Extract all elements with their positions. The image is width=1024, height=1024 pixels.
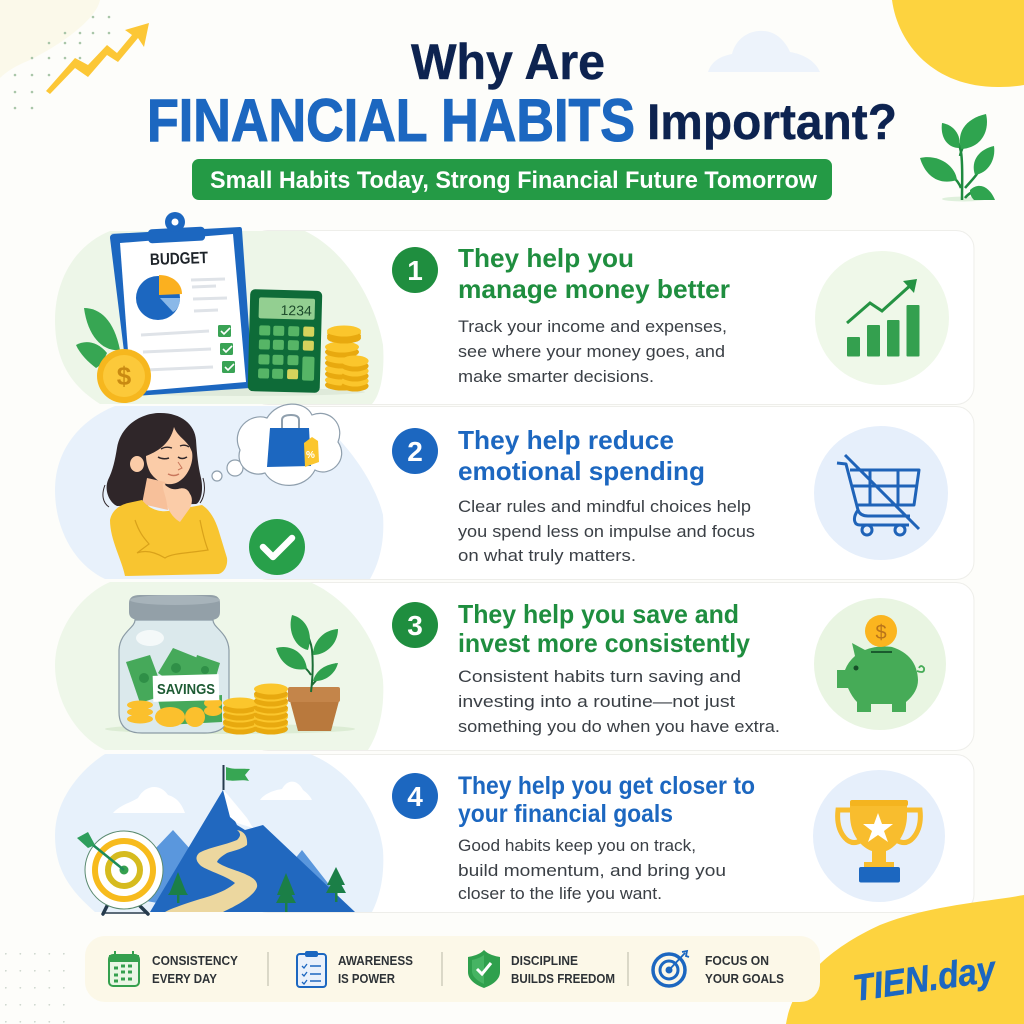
clipboard icon and label: IS POWER	[338, 972, 395, 986]
icon: piggy bank: $	[875, 622, 887, 644]
body text 1	[458, 317, 727, 386]
calendar icon and label	[109, 951, 239, 986]
decoration: top left corner tint	[0, 0, 100, 78]
card 3 background	[250, 582, 974, 750]
heading 2: They help reduce	[458, 425, 674, 455]
panel: save and invest	[55, 582, 974, 750]
heading 1	[458, 243, 730, 304]
heading 4: They help you get closer to	[458, 772, 755, 800]
body text 2: on what truly matters.	[458, 546, 636, 565]
heading 2	[458, 425, 705, 486]
title: FINANCIAL HABITS	[147, 87, 635, 154]
body text 2	[458, 497, 755, 565]
icon: green check badge	[249, 519, 305, 575]
title: Why Are	[411, 34, 605, 90]
body text 3: Consistent habits turn saving and	[458, 667, 741, 686]
target icon and label	[653, 951, 784, 986]
decoration: top right yellow blob	[892, 0, 1024, 87]
illustration: budget clipboard, calculator and coins: 1234	[280, 302, 312, 319]
icon: growth chart	[815, 251, 949, 385]
title: Important?	[647, 94, 897, 150]
decoration: bottom right yellow blob	[786, 895, 1024, 1024]
blob 4	[55, 754, 383, 912]
number badge 2: 2	[407, 436, 423, 467]
number badge 1: 1	[407, 255, 423, 286]
heading 1: They help you	[458, 243, 634, 273]
body text 3	[458, 667, 780, 736]
illustration: savings jar, coins and plant	[105, 595, 355, 734]
illustration: savings jar, coins and plant: SAVINGS	[157, 681, 215, 698]
card 1 background	[250, 230, 974, 404]
heading 3: invest more consistently	[458, 628, 751, 658]
number badge 2	[392, 428, 438, 474]
number badge 1	[392, 247, 438, 293]
logo: TIEN.day	[850, 948, 1000, 1009]
body text 2: you spend less on impulse and focus	[458, 522, 755, 541]
number badge 4	[392, 773, 438, 819]
panel: emotional spending	[55, 404, 974, 580]
illustration: budget clipboard, calculator and coins: BUDGET	[150, 249, 208, 269]
shield icon and label: DISCIPLINE	[511, 954, 578, 968]
body text 1: Track your income and expenses,	[458, 317, 727, 336]
icon: trophy	[813, 770, 945, 902]
body text 4	[458, 836, 726, 903]
thought bubble with shopping bag: %	[306, 450, 315, 461]
heading 2: emotional spending	[458, 456, 705, 486]
panel: footer strip	[85, 936, 820, 1002]
body text 1: make smarter decisions.	[458, 367, 654, 386]
blob 2	[55, 406, 383, 579]
calendar icon and label: EVERY DAY	[152, 972, 218, 986]
card 4 background	[250, 754, 974, 912]
heading 4: your financial goals	[458, 800, 673, 828]
thought bubble with shopping bag	[212, 404, 342, 485]
number badge 3: 3	[407, 610, 423, 641]
body text 3: something you do when you have extra.	[458, 717, 780, 736]
shield icon and label	[468, 950, 615, 988]
shield icon and label: BUILDS FREEDOM	[511, 972, 615, 986]
title	[147, 34, 897, 154]
clipboard icon and label: AWARENESS	[338, 954, 413, 968]
body text 3: investing into a routine—not just	[458, 692, 735, 711]
body text 4: build momentum, and bring you	[458, 861, 726, 880]
body text 4: Good habits keep you on track,	[458, 836, 696, 855]
blob 3	[55, 582, 383, 750]
icon: piggy bank	[814, 598, 946, 730]
subtitle banner	[192, 159, 832, 200]
illustration: thinking woman	[103, 413, 227, 576]
decoration: pale cloud	[708, 31, 820, 72]
decoration: top left dots	[14, 16, 110, 109]
heading 3	[458, 599, 751, 658]
illustration: budget clipboard, calculator and coins: $	[117, 361, 132, 391]
target icon and label: FOCUS ON	[705, 954, 769, 968]
decoration: bottom left dots	[0, 950, 70, 1024]
heading 4	[458, 772, 755, 828]
subtitle banner: Small Habits Today, Strong Financial Future Tomorrow	[210, 167, 817, 194]
panel: manage money	[55, 212, 974, 404]
number badge 3	[392, 602, 438, 648]
clipboard icon and label	[297, 951, 413, 987]
illustration: mountain and target	[77, 765, 355, 914]
calendar icon and label: CONSISTENCY	[152, 954, 239, 968]
icon: crossed out cart	[814, 426, 948, 560]
card 2 background	[250, 406, 974, 580]
heading 1: manage money better	[458, 274, 730, 304]
number badge 4: 4	[407, 781, 423, 812]
body text 4: closer to the life you want.	[458, 884, 662, 903]
illustration: budget clipboard, calculator and coins	[76, 212, 369, 403]
panel: financial goals	[55, 754, 974, 914]
heading 3: They help you save and	[458, 599, 739, 629]
body text 1: see where your money goes, and	[458, 342, 725, 361]
body text 2: Clear rules and mindful choices help	[458, 497, 751, 516]
blob 1	[55, 231, 383, 404]
target icon and label: YOUR GOALS	[705, 972, 784, 986]
icon: sprout top right	[920, 114, 995, 202]
arrow: rising yellow zigzag	[46, 23, 149, 94]
